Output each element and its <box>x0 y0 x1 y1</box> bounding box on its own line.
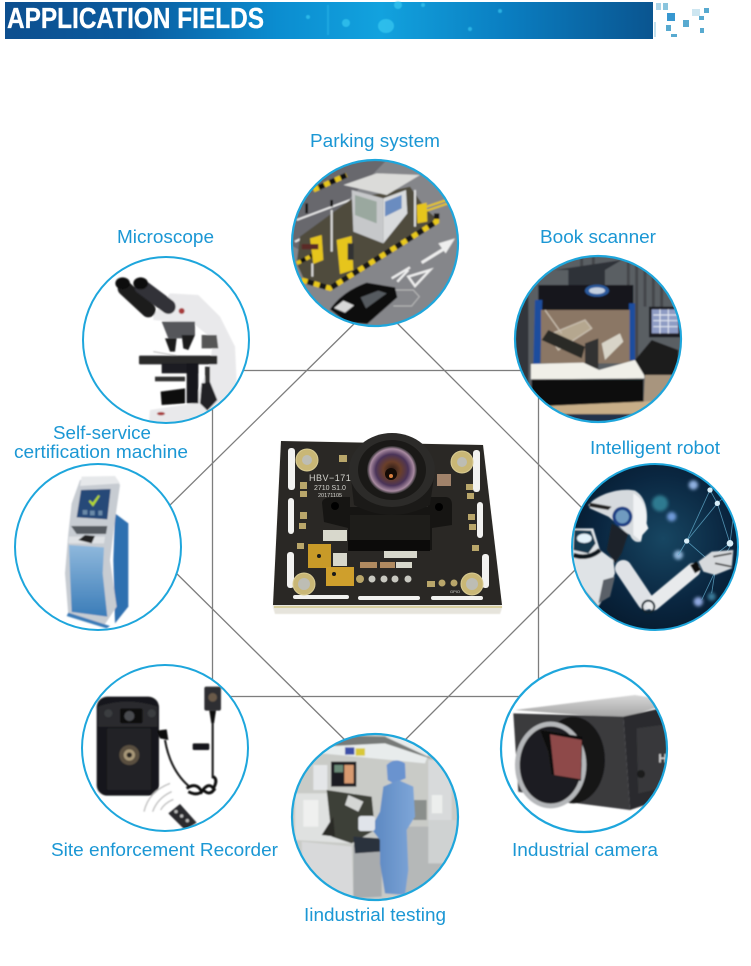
small solder pads <box>297 455 479 587</box>
connector lines <box>165 318 582 745</box>
label: self-service certification machine: certification machine <box>14 442 188 462</box>
clean room illustration <box>290 733 460 903</box>
header banner <box>5 1 709 39</box>
center product: camera module <box>273 433 502 614</box>
silkscreen model text: GPIO <box>450 589 460 594</box>
kiosk illustration <box>65 476 128 628</box>
label: self-service certification machine <box>14 423 188 462</box>
panel: self-service certification machine <box>15 464 181 630</box>
label: industrial testing: Iindustrial testing <box>304 905 446 925</box>
panel: industrial camera <box>501 666 675 832</box>
mounting slots <box>287 448 489 600</box>
microscope illustration <box>115 277 237 427</box>
book scanner illustration <box>516 258 680 421</box>
machine vision camera illustration <box>513 695 675 810</box>
panel: industrial testing <box>290 733 460 903</box>
panel: intelligent robot <box>572 464 738 630</box>
label: book scanner: Book scanner <box>540 227 656 247</box>
machine vision camera illustration: H <box>658 751 667 765</box>
lens barrel <box>350 470 435 515</box>
label: self-service certification machine: Self-service <box>53 423 151 443</box>
gold mounting rings <box>293 449 483 595</box>
panel: microscope <box>83 257 249 427</box>
panel: parking system <box>287 157 463 330</box>
panel: book scanner <box>512 253 685 427</box>
label: intelligent robot: Intelligent robot <box>590 438 720 458</box>
silkscreen model text <box>309 473 460 594</box>
parking scene <box>293 161 456 324</box>
robot illustration <box>572 480 735 613</box>
body camera illustration <box>97 687 221 830</box>
silkscreen model text: 20171105 <box>318 493 342 499</box>
title: APPLICATION FIELDS <box>7 3 264 35</box>
lens holder <box>322 497 452 550</box>
panel: site enforcement recorder <box>82 665 248 831</box>
silkscreen model text: 2710 S1.0 <box>314 485 346 492</box>
label: industrial camera: Industrial camera <box>512 840 659 860</box>
gold components <box>308 544 331 568</box>
label: microscope: Microscope <box>117 227 214 247</box>
label: parking system: Parking system <box>310 131 440 151</box>
silkscreen model text: HBV−1716 <box>309 473 357 483</box>
label: site enforcement recorder: Site enforcement Recorder <box>51 840 278 860</box>
banner pixel decoration <box>654 3 709 37</box>
smd parts <box>323 474 451 568</box>
